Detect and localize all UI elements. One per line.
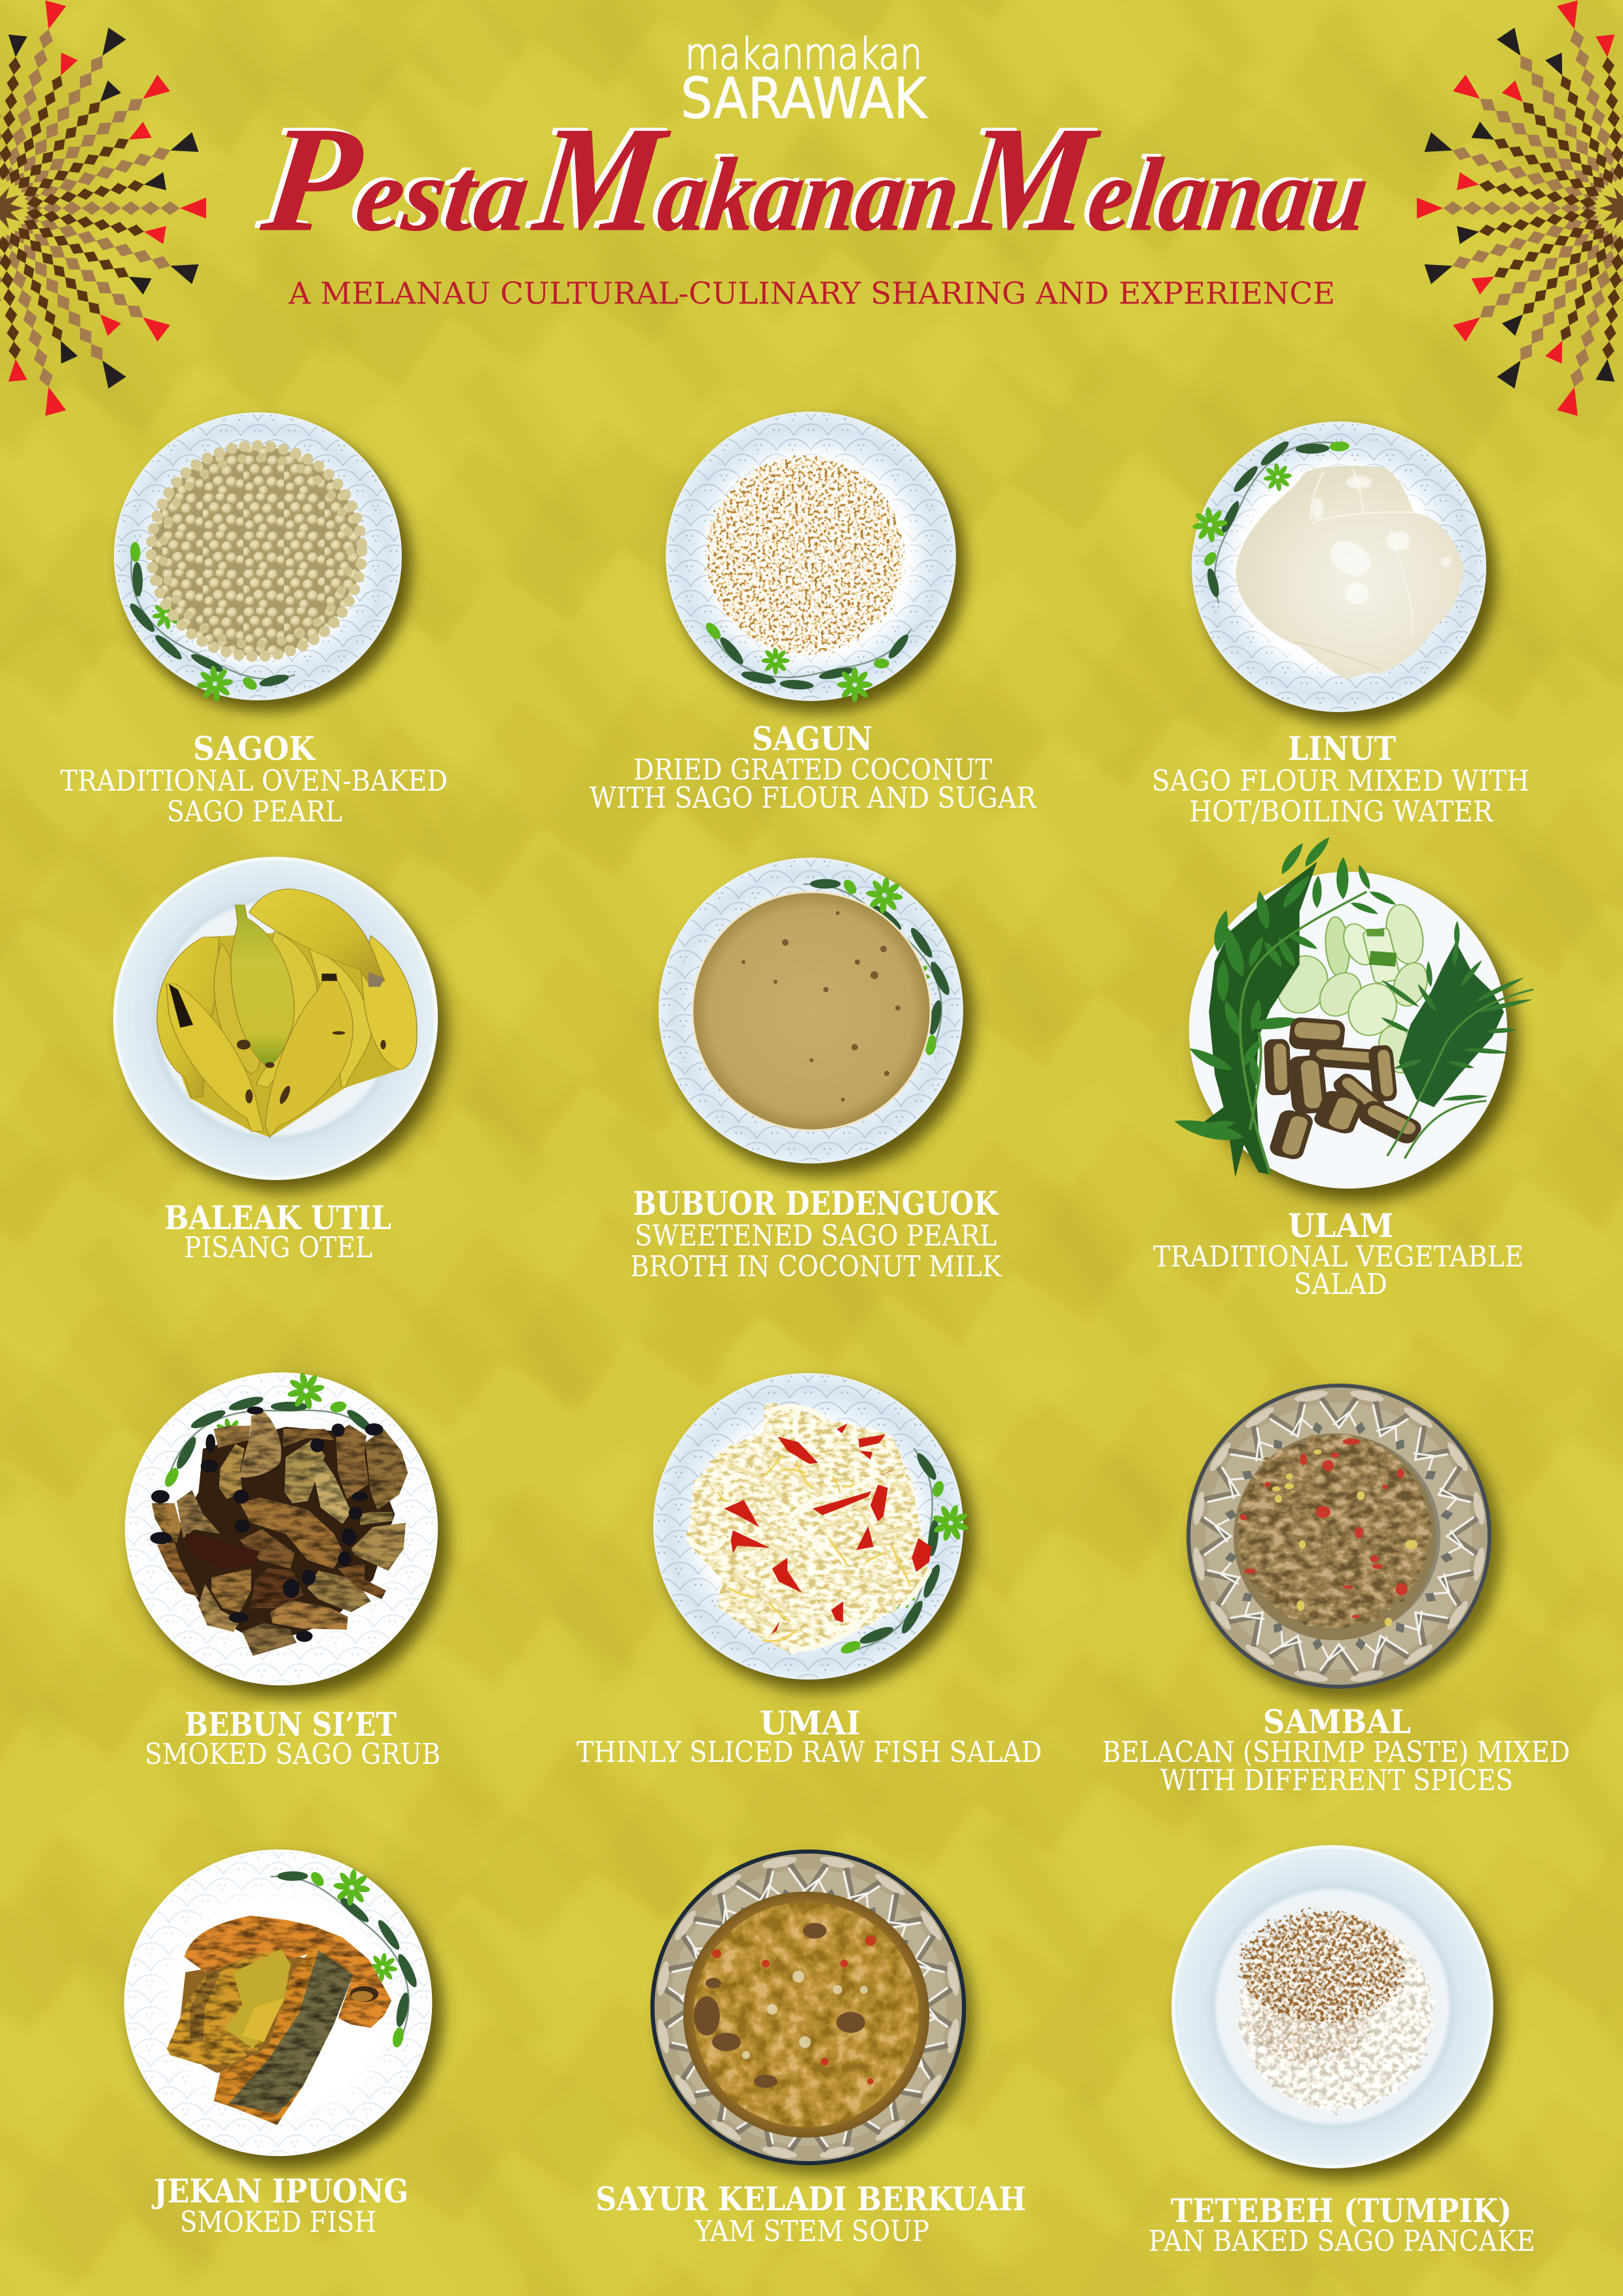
logo: makanmakan sarawak: SARAWAK	[681, 66, 928, 132]
dish: bebun si'et plate with grubs	[125, 1360, 448, 1698]
dish: jekan ipuong plate with smoked fish	[124, 1830, 463, 2168]
label: ulam: ULAM	[1288, 1206, 1393, 1245]
dish: sayur keladi berkuah glass bowl	[649, 1848, 974, 2176]
label: ulam: SALAD	[1294, 1268, 1387, 1301]
title: Pesta	[251, 93, 536, 260]
label: jekan ipuong	[151, 2172, 408, 2239]
label: umai: THINLY SLICED RAW FISH SALAD	[577, 1736, 1042, 1769]
label: jekan ipuong: JEKAN IPUONG	[151, 2172, 408, 2210]
dish: tetebeh plate	[1173, 1847, 1503, 2179]
label: baleak util: PISANG OTEL	[184, 1231, 372, 1265]
label: baleak util: BALEAK UTIL	[164, 1198, 391, 1237]
dish: sagok plate	[82, 412, 412, 733]
label: sambal: BELACAN (SHRIMP PASTE) MIXED	[1102, 1736, 1570, 1769]
label: sagun: SAGUN	[752, 719, 872, 758]
title: Pesta	[255, 96, 541, 262]
label: sagok: SAGOK	[193, 729, 315, 768]
right tribal burst	[1417, 1, 1623, 416]
label: baleak util	[164, 1198, 391, 1265]
label: jekan ipuong: SMOKED FISH	[180, 2206, 376, 2239]
subtitle: A MELANAU CULTURAL-CULINARY SHARING AND EXPERIENCE	[288, 276, 1335, 311]
dish: baleak util plate with bananas	[115, 859, 447, 1191]
label: tetebeh	[1149, 2191, 1535, 2258]
label: sagun: WITH SAGO FLOUR AND SUGAR	[590, 781, 1037, 815]
dish: bubuor dedenguok plate	[658, 838, 995, 1176]
title: Makanan	[521, 93, 967, 260]
dish: umai plate	[653, 1373, 987, 1692]
logo: makanmakan sarawak	[681, 29, 928, 132]
label: linut	[1152, 729, 1529, 829]
label: sagun: DRIED GRATED COCONUT	[633, 753, 992, 787]
label: linut: LINUT	[1288, 729, 1396, 768]
title	[251, 93, 1380, 262]
label: bebun si'et: BEBUN SI’ET	[185, 1705, 397, 1744]
dish: ulam plate with vegetables	[1171, 834, 1533, 1202]
label: sayur keladi berkuah: YAM STEM SOUP	[694, 2215, 929, 2248]
dish: linut plate	[1161, 395, 1496, 724]
label: sagok	[60, 729, 448, 829]
label: ulam: TRADITIONAL VEGETABLE	[1153, 1240, 1524, 1274]
label: tetebeh: TETEBEH (TUMPIK)	[1171, 2191, 1512, 2230]
label: sambal	[1102, 1702, 1570, 1797]
logo: makanmakan sarawak: makanmakan	[685, 29, 922, 79]
label: bubuor dedenguok: SWEETENED SAGO PEARL	[635, 1219, 997, 1253]
title: Melanau	[954, 96, 1380, 262]
label: umai	[577, 1704, 1042, 1769]
dish: sagun plate	[666, 412, 966, 713]
label: ulam	[1153, 1206, 1524, 1301]
label: bubuor dedenguok: BUBUOR DEDENGUOK	[633, 1184, 999, 1223]
label: sambal: WITH DIFFERENT SPICES	[1160, 1764, 1513, 1797]
label: linut: HOT/BOILING WATER	[1189, 795, 1494, 829]
title: Makanan	[526, 96, 971, 262]
label: sagok: TRADITIONAL OVEN-BAKED	[60, 764, 448, 798]
label: bebun si'et: SMOKED SAGO GRUB	[145, 1738, 440, 1771]
left tribal burst	[0, 1, 206, 416]
label: umai: UMAI	[760, 1704, 861, 1742]
label: bubuor dedenguok: BROTH IN COCONUT MILK	[630, 1250, 1002, 1283]
label: sambal: SAMBAL	[1263, 1702, 1411, 1741]
title: Melanau	[949, 93, 1375, 260]
label: bebun si'et	[145, 1705, 440, 1771]
dish: sambal glass bowl	[1185, 1382, 1502, 1701]
label: sayur keladi berkuah	[596, 2179, 1026, 2248]
label: sagok: SAGO PEARL	[167, 795, 342, 829]
label: bubuor dedenguok	[630, 1184, 1002, 1283]
label: sagun	[590, 719, 1037, 815]
label: linut: SAGO FLOUR MIXED WITH	[1152, 764, 1529, 798]
label: sayur keladi berkuah: SAYUR KELADI BERKUAH	[596, 2179, 1026, 2218]
label: tetebeh: PAN BAKED SAGO PANCAKE	[1149, 2225, 1535, 2258]
